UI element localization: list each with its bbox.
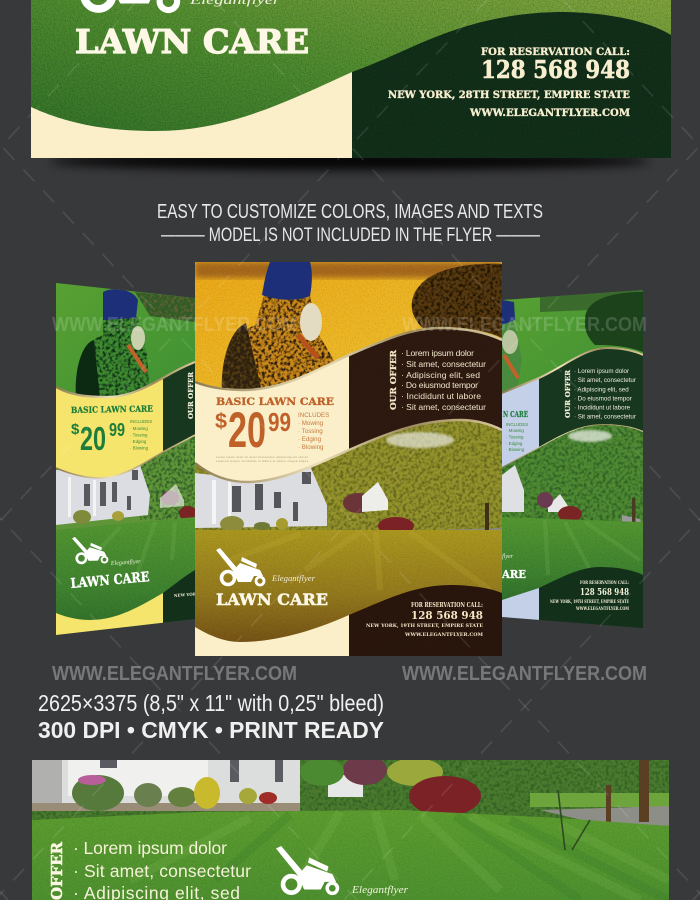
our offer bottom banner: OFFER (48, 841, 66, 900)
center offer list: · Incididunt ut labore (401, 391, 481, 401)
right includes list: · Edging (506, 441, 523, 446)
script fragment: flyer (502, 553, 514, 560)
center lawn (195, 530, 502, 655)
left flyer includes list (130, 419, 152, 450)
banner drop shadow (50, 152, 650, 170)
left flyer includes list: · Mowing (130, 426, 148, 431)
right includes list: · Mowing (506, 428, 524, 433)
dark green contact panel (352, 12, 671, 158)
right heading fragment: N CARE (503, 409, 528, 419)
cream bottom (195, 615, 349, 656)
right includes list: INCLUDES (506, 422, 528, 427)
our offer right: OUR OFFER (564, 369, 572, 418)
left flyer heading: BASIC LAWN CARE (71, 405, 153, 416)
center contact: WWW.ELEGANTFLYER.COM (404, 632, 483, 638)
center price: $ (215, 410, 227, 433)
cream panel (195, 355, 349, 482)
center includes list: · Blowing (298, 444, 324, 451)
center offer list (401, 348, 486, 412)
right contact: WWW.ELEGANTFLYER.COM (575, 607, 629, 612)
center includes list: · Tossing (298, 428, 323, 435)
right offer list: · Sit amet, consectetur (574, 377, 636, 384)
watermark below flyers: WWW.ELEGANTFLYER.COM (402, 663, 647, 685)
dark bottom (163, 570, 195, 625)
man with trimmer (75, 317, 150, 398)
brown bottom (349, 585, 502, 656)
contact details: WWW.ELEGANTFLYER.COM (469, 107, 630, 119)
logo script center: Elegantflyer (271, 573, 316, 583)
lawn (56, 517, 195, 640)
center fine print: eiusmod tempor incididunt ut labore et dolore magna aliqua (216, 459, 308, 463)
lawn care fragment: ARE (501, 568, 526, 581)
mower logo left (72, 536, 107, 564)
center heading: BASIC LAWN CARE (216, 396, 334, 408)
dark bottom right (539, 567, 643, 630)
contact details: 128 568 948 (481, 55, 630, 84)
house photo (56, 436, 195, 530)
dark green offer panel (163, 362, 195, 452)
logo script bottom: Elegantflyer (351, 884, 409, 896)
left flyer includes list: · Blowing (130, 446, 149, 450)
house and trees photo (195, 420, 502, 540)
contact details: FOR RESERVATION CALL: (481, 46, 630, 58)
right contact: NEW YORK, 19TH STREET, EMPIRE STATE (550, 599, 629, 604)
center includes list: INCLUDES (298, 412, 329, 419)
left flyer price: 99 (109, 420, 125, 440)
center offer list: · Sit amet, consectetur (401, 402, 486, 412)
center contact: NEW YORK, 19TH STREET, EMPIRE STATE (366, 623, 483, 629)
bottom banner offer list: · Lorem ipsum dolor (73, 838, 227, 858)
center fine print: Lorem ipsum dolor sit amet consectetur adipiscing elit sed do (216, 455, 308, 459)
right includes list: · Blowing (506, 447, 525, 452)
blue panel (502, 378, 539, 468)
right flyer (501, 288, 643, 630)
right contact: 128 568 948 (580, 587, 629, 598)
lawn care center title: LAWN CARE (216, 590, 328, 609)
left flyer includes list: INCLUDES (130, 419, 152, 424)
right contact (550, 580, 629, 612)
yellow bottom (56, 593, 163, 635)
center contact (366, 602, 483, 638)
watermark below flyers (52, 663, 647, 685)
center offer list: · Sit amet, consectetur (401, 359, 486, 369)
bottom banner offer list (73, 838, 251, 900)
watermark below flyers: WWW.ELEGANTFLYER.COM (52, 663, 297, 685)
our offer center: OUR OFFER (388, 350, 398, 410)
blue bottom (502, 588, 539, 622)
center offer list: · Adipiscing elit, sed (401, 370, 480, 380)
dark bottom text: NEW YORK, 19TH (174, 590, 215, 598)
center price: 20 (228, 402, 266, 458)
brown offer panel (349, 328, 502, 450)
customization note: ——— MODEL IS NOT INCLUDED IN THE FLYER ——— (161, 225, 540, 246)
right offer list: · Lorem ipsum dolor (574, 368, 629, 375)
right offer list: · Do eiusmod tempor (574, 396, 632, 402)
right offer list: · Adipiscing elit, sed (574, 386, 629, 394)
mower logo center (216, 548, 264, 585)
file specifications: 300 DPI • CMYK • PRINT READY (38, 717, 384, 743)
man with trimmer center (222, 295, 335, 392)
center flyer (195, 262, 502, 656)
left flyer price (71, 423, 124, 450)
right includes list: · Tossing (506, 434, 524, 440)
yellow panel (56, 378, 163, 478)
watermark on flyers: WWW.ELEGANTFLYER.COM (402, 314, 647, 336)
right contact: FOR RESERVATION CALL: (580, 580, 629, 586)
left flyer price: 20 (80, 420, 106, 457)
center contact: 128 568 948 (411, 608, 483, 622)
mower logo top (72, 0, 177, 10)
center includes list (298, 412, 329, 451)
contact details (388, 46, 630, 119)
gold waves center (195, 328, 502, 482)
center contact: FOR RESERVATION CALL: (411, 602, 483, 609)
right offer list: · Sit amet, consectetur (574, 414, 636, 420)
center price: 99 (268, 407, 291, 437)
contact details: NEW YORK, 28TH STREET, EMPIRE STATE (388, 89, 630, 101)
striped lawn (32, 810, 669, 900)
center offer list: · Do eiusmod tempor (401, 380, 478, 390)
top photo (195, 262, 502, 392)
man with trimmer right part (502, 312, 522, 392)
lawn care left title: LAWN CARE (70, 569, 150, 592)
tree photo right (502, 425, 643, 522)
watermark on flyers (52, 314, 647, 336)
bottom banner flyer (32, 755, 669, 900)
customization note: EASY TO CUSTOMIZE COLORS, IMAGES AND TEXTS (157, 201, 543, 223)
right offer list (574, 368, 636, 420)
center includes list: · Mowing (298, 420, 324, 427)
dark green offer panel right (539, 348, 643, 448)
watermark on flyers: WWW.ELEGANTFLYER.COM (52, 314, 297, 336)
left flyer price: $ (71, 421, 80, 438)
left flyer includes list: · Tossing (130, 432, 148, 438)
center includes list: · Edging (298, 436, 322, 443)
file specifications (38, 690, 384, 743)
lawn care title: LAWN CARE (75, 22, 309, 61)
center offer list: · Lorem ipsum dolor (401, 348, 474, 358)
left flyer (56, 283, 195, 635)
lawn right (502, 517, 643, 600)
mower logo bottom (276, 846, 337, 893)
cream corner panel (31, 72, 352, 158)
left flyer includes list: · Edging (130, 439, 147, 444)
top banner flyer (31, 0, 671, 158)
file specifications: 2625×3375 (8,5" x 11" with 0,25" bleed) (38, 690, 384, 716)
right offer list: · Incididunt ut labore (574, 404, 631, 412)
center fine print (216, 455, 308, 463)
our offer left: OUR OFFER (187, 371, 195, 419)
bottom banner offer list: · Sit amet, consectetur (73, 861, 251, 881)
logo script left: Elegantflyer (110, 558, 141, 567)
gold wave (56, 362, 195, 397)
house and garden photo (32, 755, 669, 826)
right includes list (506, 422, 528, 452)
customization note (157, 201, 543, 246)
gold wave right (502, 348, 643, 468)
